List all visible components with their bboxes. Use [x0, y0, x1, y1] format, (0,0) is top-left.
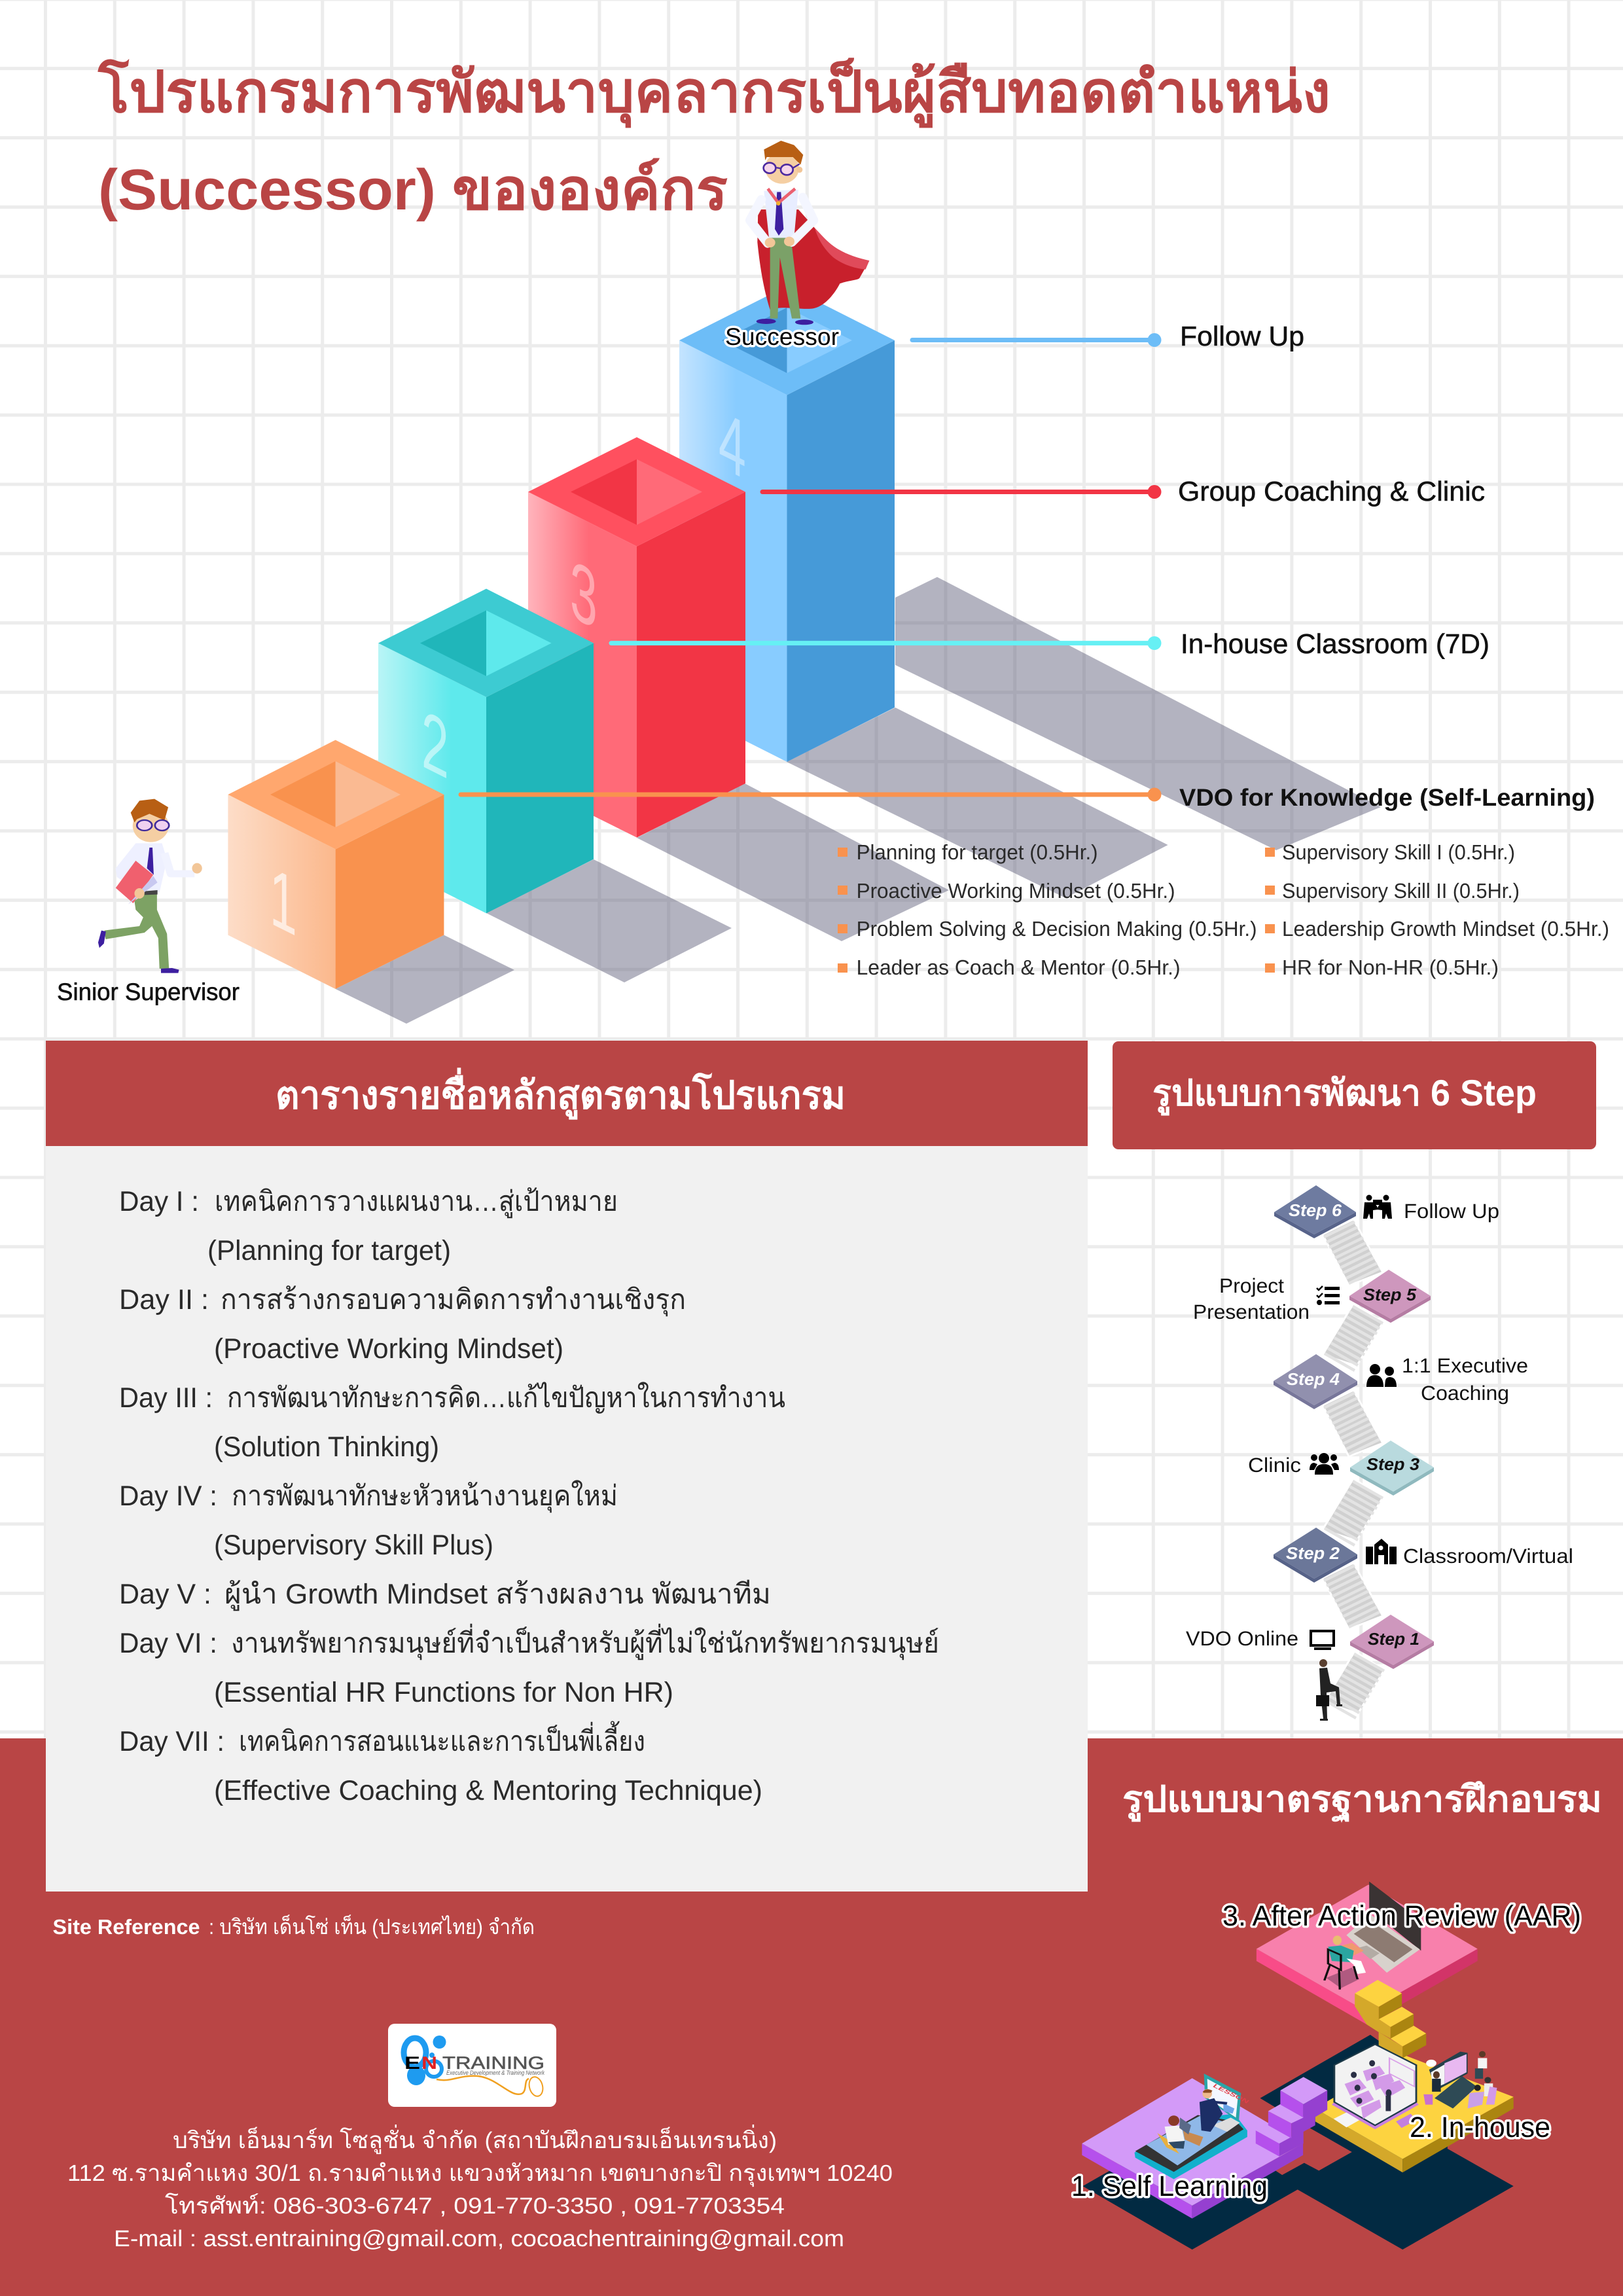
- table body: เทคนิคการสอนแนะและการเป็นพี่เลี้ยง: [239, 1721, 645, 1757]
- table body: (Supervisory Skill Plus): [214, 1530, 493, 1561]
- step 2 platform: [1274, 1528, 1357, 1583]
- column 3: 3: [570, 543, 597, 647]
- column 2: [378, 589, 594, 913]
- shadows of the columns: [336, 577, 1381, 1024]
- site reference: [52, 1914, 535, 1939]
- purple platform: [1082, 2078, 1303, 2219]
- step 2 platform: Step 2: [1286, 1543, 1340, 1563]
- icon: monitor: [1311, 1631, 1334, 1650]
- step 1 platform: [1350, 1615, 1434, 1669]
- level labels: Group Coaching & Clinic: [1178, 476, 1485, 507]
- step labels: [1186, 1200, 1573, 1650]
- company contact: บริษัท เอ็นมาร์ท โซลูชั่น จำกัด (สถาบันฝึกอบรมเอ็นเทรนนิ่ง): [173, 2125, 777, 2155]
- table body: Day III :: [119, 1382, 213, 1414]
- table body: การพัฒนาทักษะหัวหน้างานยุคใหม่: [232, 1480, 618, 1513]
- table body: Day VI :: [119, 1628, 217, 1659]
- heading: training format: รูปแบบมาตรฐานการฝึกอบรม: [1122, 1778, 1602, 1823]
- table body: Day I :: [119, 1186, 199, 1217]
- column 1: [228, 740, 444, 989]
- table body: Day VII :: [119, 1726, 224, 1757]
- illustration: laptop review: [1325, 1882, 1421, 1990]
- step labels: 1:1 Executive: [1402, 1354, 1528, 1377]
- logo: EN Training: TRAINING: [442, 2053, 544, 2073]
- company contact: E-mail : asst.entraining@gmail.com, cocoachentraining@gmail.com: [114, 2226, 844, 2251]
- illustration: virtual class: [1423, 2051, 1497, 2109]
- panel: course table: [46, 1041, 1088, 1892]
- logo: EN Training: N: [421, 2053, 437, 2073]
- VDO course list: HR for Non-HR (0.5Hr.): [1282, 956, 1499, 979]
- level labels: [1178, 321, 1595, 811]
- table body: (Essential HR Functions for Non HR): [214, 1677, 673, 1708]
- icon: follow up: [1363, 1195, 1392, 1219]
- VDO course list: Planning for target (0.5Hr.): [857, 840, 1098, 864]
- VDO course list: Proactive Working Mindset (0.5Hr.): [857, 879, 1175, 903]
- step labels: Coaching: [1421, 1382, 1509, 1405]
- step labels: Classroom/Virtual: [1403, 1545, 1573, 1568]
- logo: EN Training: [388, 2024, 556, 2107]
- step 1 platform: Step 1: [1368, 1629, 1419, 1649]
- table body: ผู้นำ Growth Mindset สร้างผลงาน พัฒนาทีม: [224, 1579, 771, 1611]
- company contact: 112 ซ.รามคำแหง 30/1 ถ.รามคำแหง แขวงหัวหมาก เขตบางกะปิ กรุงเทพฯ 10240: [67, 2161, 893, 2187]
- yellow steps tops: [1355, 1980, 1426, 2058]
- level labels: In-house Classroom (7D): [1181, 628, 1489, 659]
- table header: ตารางรายชื่อหลักสูตรตามโปรแกรม: [276, 1067, 846, 1120]
- step 4 platform: [1274, 1354, 1357, 1409]
- table body: การพัฒนาทักษะการคิด…แก้ไขปัญหาในการทำงาน: [227, 1382, 785, 1414]
- icon: classroom building: [1366, 1539, 1397, 1564]
- purple steps: [1256, 2077, 1327, 2157]
- icon: clinic group: [1310, 1453, 1339, 1475]
- panel header: 6 step model: [1113, 1041, 1596, 1149]
- logo: EN Training: E: [404, 2053, 420, 2073]
- yellow steps: [1355, 1994, 1426, 2058]
- label: Sinior Supervisor: Sinior Supervisor: [57, 978, 240, 1005]
- step 3 platform: [1350, 1441, 1434, 1496]
- table body: [46, 1146, 1088, 1892]
- label: 2. In-house: 2. In-house: [1410, 2111, 1550, 2144]
- step labels: Follow Up: [1404, 1200, 1499, 1223]
- step 5 platform: [1349, 1270, 1431, 1323]
- step 6 platform: [1274, 1185, 1356, 1238]
- red footer band: [0, 1738, 1623, 2296]
- table body: Day II :: [119, 1284, 209, 1316]
- table body: (Proactive Working Mindset): [214, 1333, 563, 1365]
- character: senior supervisor running: [98, 799, 202, 973]
- stairs: [1323, 1219, 1384, 1718]
- step labels: VDO Online: [1186, 1627, 1298, 1650]
- illustration: phone lesson: [1135, 2073, 1251, 2179]
- logo: EN Training: Executive Development & Training Network: [446, 2070, 545, 2077]
- step 3 platform: Step 3: [1366, 1454, 1420, 1474]
- column 4: [679, 286, 895, 762]
- level labels: Follow Up: [1180, 321, 1304, 351]
- label: 3. After Action Review: 3. After Action Review (AAR): [1222, 1900, 1581, 1932]
- character: successor with cape: [750, 141, 869, 325]
- icon: businessman climbing: [1316, 1659, 1342, 1721]
- step labels: Clinic: [1248, 1454, 1301, 1477]
- VDO course list: Leadership Growth Mindset (0.5Hr.): [1282, 917, 1609, 941]
- column 4: 4: [719, 393, 746, 497]
- connector lines with end dots: [461, 333, 1161, 801]
- title: (Successor) ขององค์กร: [98, 157, 728, 222]
- title: [98, 58, 1330, 222]
- isometric training diagram: [1082, 1882, 1514, 2250]
- step 6 platform: Step 6: [1289, 1200, 1342, 1220]
- step labels: Presentation: [1193, 1300, 1310, 1323]
- VDO course list: [838, 840, 1609, 979]
- company contact: [67, 2125, 893, 2251]
- VDO course list: Supervisory Skill I (0.5Hr.): [1282, 840, 1515, 864]
- title: โปรแกรมการพัฒนาบุคลากรเป็นผู้สืบทอดตำแหน่ง: [98, 58, 1330, 128]
- illustration: classroom: [1332, 2045, 1419, 2129]
- staircase diagram: [1186, 1185, 1573, 1721]
- VDO course list: Leader as Coach & Mentor (0.5Hr.): [857, 956, 1181, 979]
- dark base: [1082, 2035, 1514, 2250]
- pink platform: [1257, 1885, 1478, 2024]
- table body: (Solution Thinking): [214, 1431, 439, 1463]
- illustration: phone lesson: LESSON: [1211, 2083, 1251, 2105]
- table body: งานทรัพยากรมนุษย์ที่จำเป็นสำหรับผู้ที่ไม่ใช่นักทรัพยากรมนุษย์: [231, 1623, 939, 1660]
- table body: การสร้างกรอบความคิดการทำงานเชิงรุก: [221, 1284, 686, 1317]
- table body: (Effective Coaching & Mentoring Technique): [214, 1775, 762, 1806]
- level labels: VDO for Knowledge (Self-Learning): [1179, 784, 1595, 811]
- table body: (Planning for target): [207, 1235, 451, 1266]
- table header: [46, 1041, 1088, 1146]
- step labels: Project: [1219, 1274, 1284, 1297]
- table body: Day IV :: [119, 1480, 217, 1512]
- column 1: 1: [270, 850, 297, 954]
- VDO course list: Problem Solving & Decision Making (0.5Hr.): [857, 917, 1257, 941]
- site reference: : บริษัท เด็นโซ่ เท็น (ประเทศไทย) จำกัด: [209, 1914, 535, 1939]
- icon: checklist: [1317, 1286, 1340, 1305]
- table body: Day V :: [119, 1579, 211, 1610]
- panel header: 6 step model: รูปแบบการพัฒนา 6 Step: [1152, 1072, 1537, 1116]
- site reference: Site Reference: [52, 1915, 200, 1939]
- label: Successor: Successor: [725, 323, 839, 350]
- company contact: โทรศัพท์: 086-303-6747 , 091-770-3350 , 091-7703354: [165, 2193, 785, 2219]
- table body: เทคนิคการวางแผนงาน…สู่เป้าหมาย: [215, 1186, 618, 1219]
- label: 1. Self Learning: 1. Self Learning: [1071, 2170, 1268, 2202]
- step 5 platform: Step 5: [1363, 1285, 1417, 1304]
- VDO course list: Supervisory Skill II (0.5Hr.): [1282, 879, 1520, 903]
- yellow platform: [1315, 2056, 1514, 2172]
- step 4 platform: Step 4: [1287, 1369, 1340, 1389]
- column 3: [528, 437, 745, 838]
- icon: coaching pair: [1366, 1364, 1397, 1387]
- column 2: 2: [421, 692, 449, 797]
